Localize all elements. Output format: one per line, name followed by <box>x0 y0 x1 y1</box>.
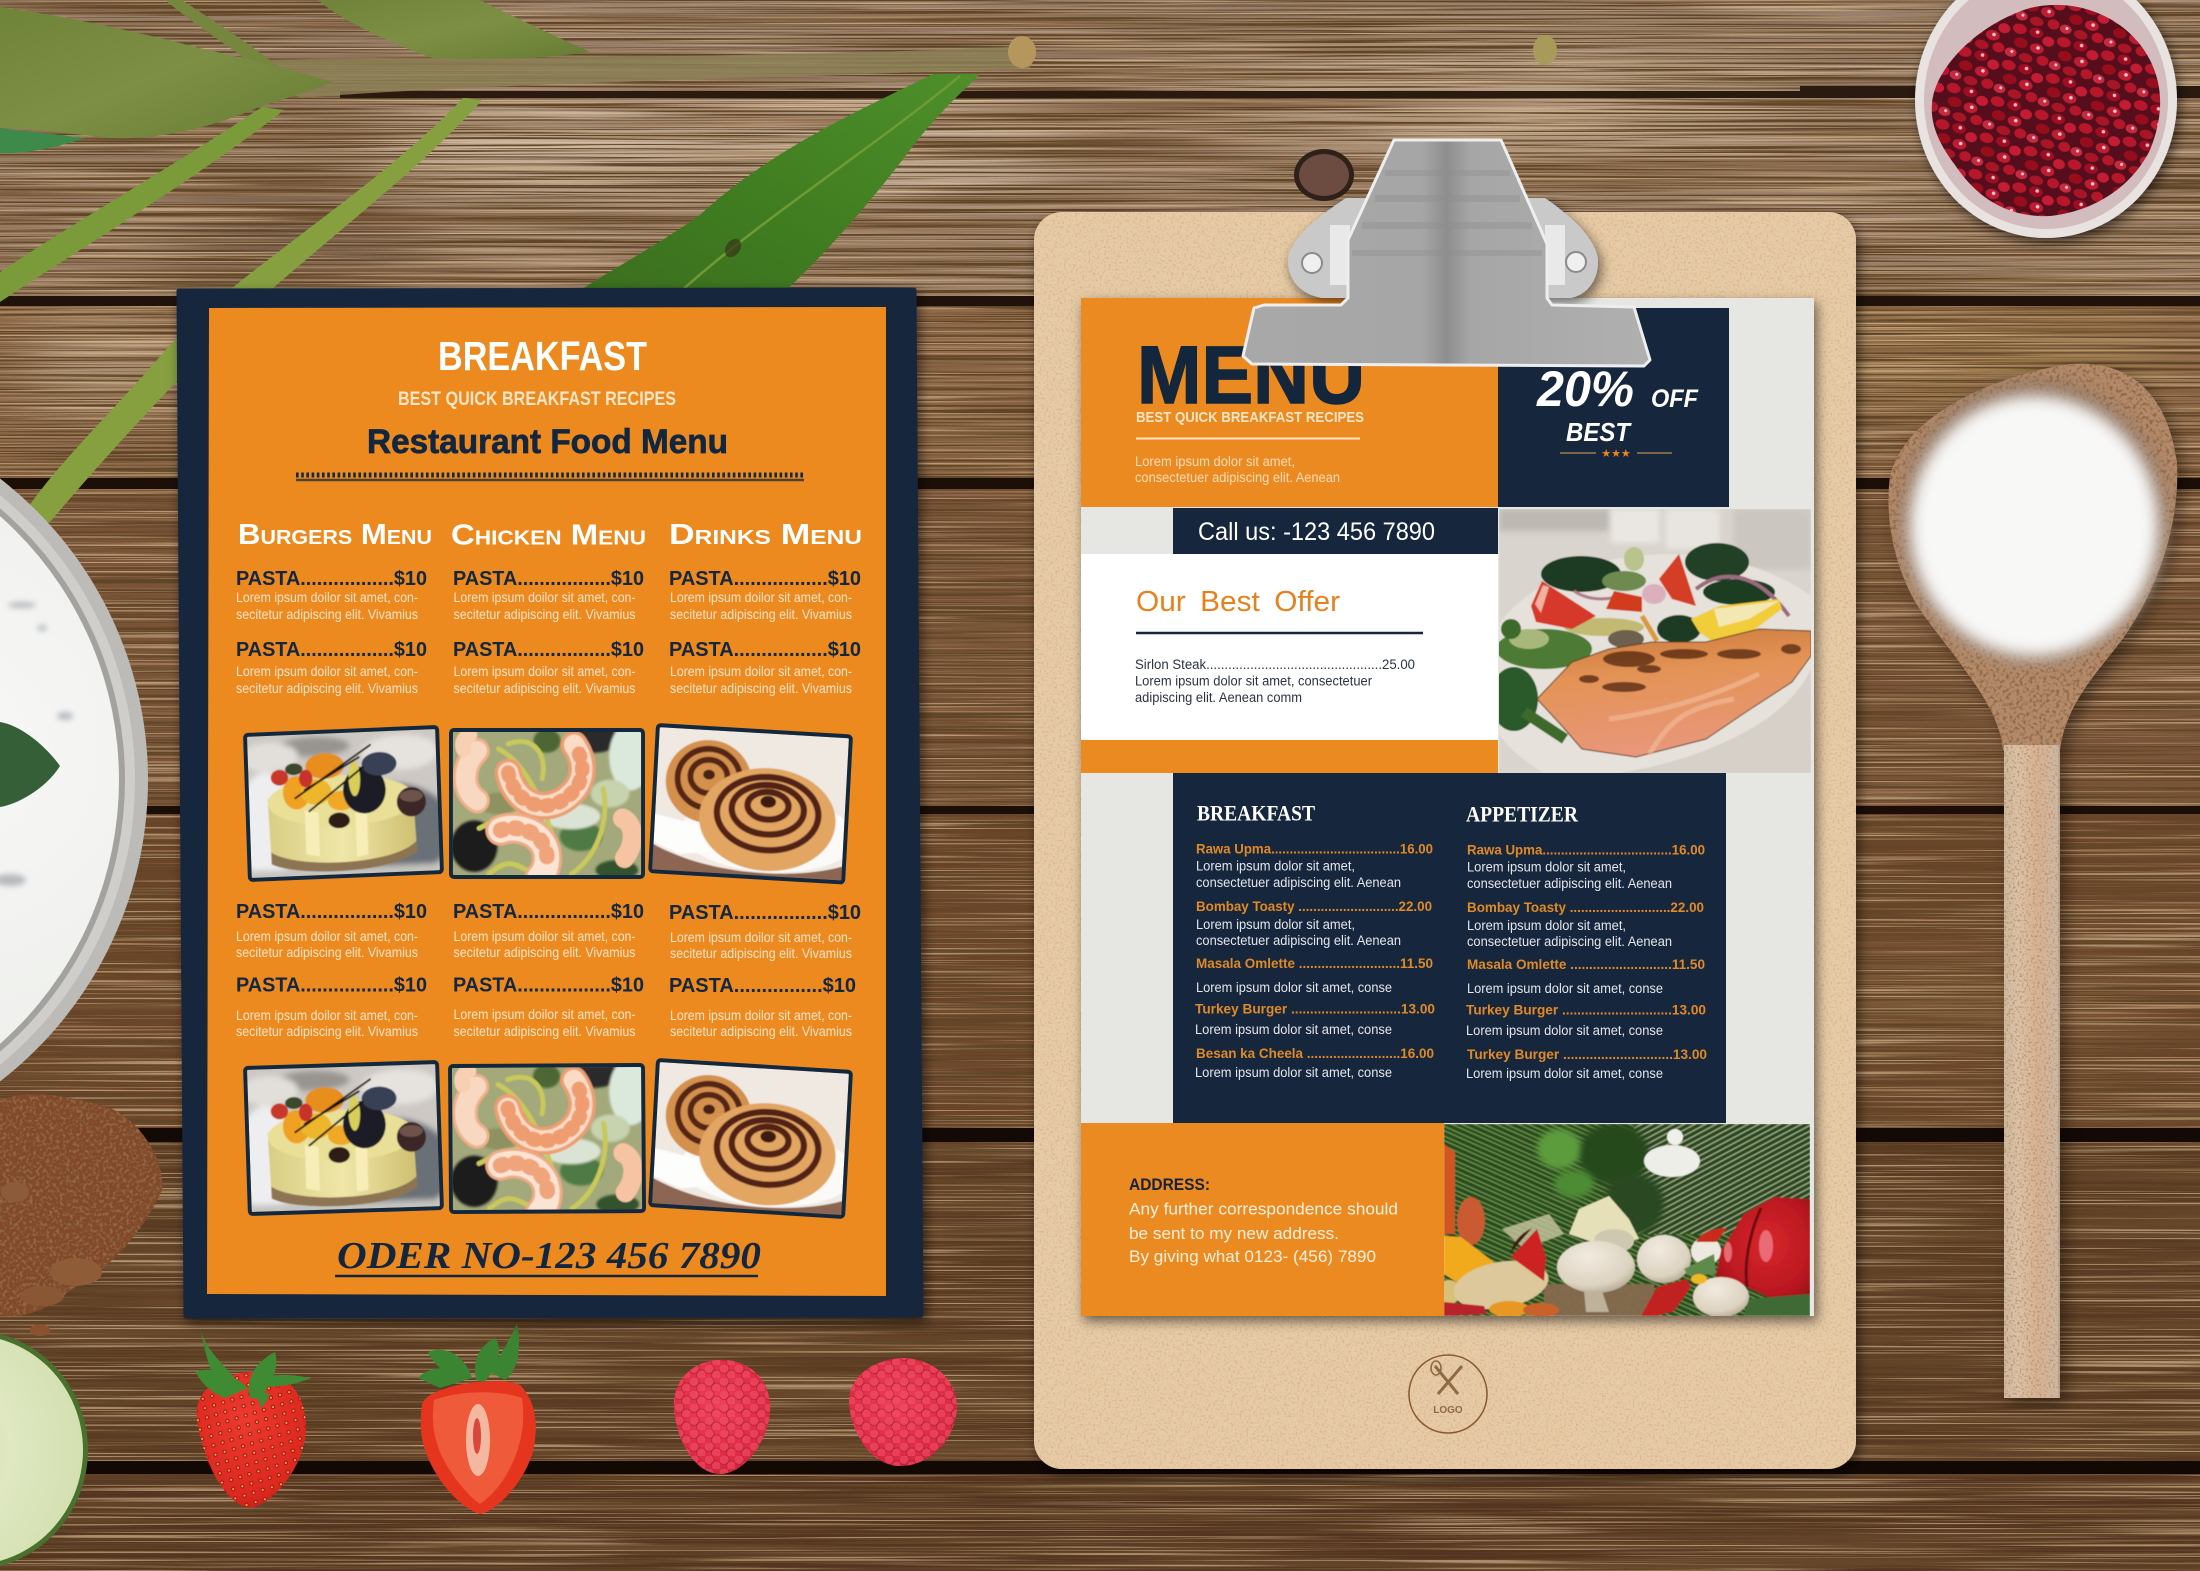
menu rows top: Lorem ipsum doilor sit amet, con- <box>670 589 852 605</box>
column headings <box>238 519 862 552</box>
appetizer list: Lorem ipsum dolor sit amet, conse <box>1467 981 1663 996</box>
breakfast list: Masala Omlette ...........................11.50 <box>1196 955 1433 971</box>
best offer block: Sirlon Steak................................................25.00 <box>1135 657 1415 672</box>
leaf: thin blade lower <box>20 98 482 522</box>
best offer block: Lorem ipsum dolor sit amet, consectetuer <box>1135 674 1372 688</box>
photo: pastry <box>649 1059 862 1219</box>
menu rows bottom: Lorem ipsum doilor sit amet, con- <box>454 928 636 944</box>
dishes panel <box>1173 773 1726 1123</box>
appetizer list: Rawa Upma...................................16.00 <box>1467 842 1705 858</box>
menu rows bottom: secitetur adipiscing elit. Vivamius <box>236 944 418 960</box>
breakfast list: Rawa Upma...................................16.00 <box>1196 840 1433 856</box>
menu rows top <box>236 568 861 696</box>
address text: ADDRESS: <box>1129 1176 1210 1194</box>
spoon handle <box>2004 745 2060 1398</box>
column headings: Drinks Menu <box>669 519 862 551</box>
pomegranate bowl <box>1900 0 2190 238</box>
menu rows bottom: PASTA.................$10 <box>669 902 861 924</box>
breakfast list: Lorem ipsum dolor sit amet, conse <box>1195 1022 1392 1037</box>
menu rows top: PASTA.................$10 <box>669 568 861 590</box>
address text: By giving what 0123- (456) 7890 <box>1129 1247 1376 1266</box>
wood knot <box>1294 149 1354 201</box>
MENU headline: MENU <box>1137 330 1365 421</box>
appetizer list: Lorem ipsum dolor sit amet, conse <box>1466 1066 1663 1081</box>
clip hinge <box>1288 198 1598 298</box>
leaf: dark green corner <box>0 128 85 153</box>
header subtitle: BEST QUICK BREAKFAST RECIPES <box>1136 409 1364 426</box>
subtitle: BEST QUICK BREAKFAST RECIPES <box>398 389 676 410</box>
vegetables photo <box>1437 1124 1810 1317</box>
best offer block <box>1135 586 1423 705</box>
raspberry <box>849 1358 957 1466</box>
photo: pastry <box>649 724 862 884</box>
best offer block: adipiscing elit. Aenean comm <box>1135 690 1302 705</box>
appetizer list: consectetuer adipiscing elit. Aenean <box>1467 876 1672 891</box>
menu rows bottom: secitetur adipiscing elit. Vivamius <box>454 944 636 960</box>
photo: shrimp salad <box>450 723 652 880</box>
title: BREAKFAST <box>438 333 647 379</box>
leaf: thin stem top <box>165 0 280 76</box>
appetizer list <box>1466 802 1707 1081</box>
menu rows bottom: PASTA.................$10 <box>236 974 427 996</box>
menu rows bottom: PASTA.................$10 <box>236 901 427 923</box>
address text: be sent to my new address. <box>1129 1224 1339 1243</box>
menu rows top: Lorem ipsum doilor sit amet, con- <box>454 589 636 605</box>
menu rows top: secitetur adipiscing elit. Vivamius <box>670 606 852 622</box>
best offer block: Our Best Offer <box>1136 586 1340 618</box>
strawberry whole <box>196 1328 311 1508</box>
column headings: Chicken Menu <box>451 520 646 552</box>
clipboard <box>1034 140 1859 1469</box>
leaf: thin blade upper <box>0 107 284 302</box>
order number: ODER NO-123 456 7890 <box>337 1235 761 1277</box>
menu rows bottom: Lorem ipsum doilor sit amet, con- <box>236 1007 418 1023</box>
menu rows top: secitetur adipiscing elit. Vivamius <box>454 606 636 622</box>
address text: Any further correspondence should <box>1129 1200 1398 1218</box>
left menu card <box>179 290 921 1316</box>
menu rows bottom: secitetur adipiscing elit. Vivamius <box>236 1023 418 1039</box>
salmon photo <box>1499 509 1811 773</box>
appetizer list: Bombay Toasty ...........................22.00 <box>1467 899 1704 915</box>
menu rows bottom: PASTA.................$10 <box>453 974 644 996</box>
breakfast list: BREAKFAST <box>1197 800 1315 826</box>
appetizer list: Turkey Burger .............................13.00 <box>1467 1046 1707 1062</box>
menu rows top: Lorem ipsum doilor sit amet, con- <box>670 663 852 679</box>
leaf: large olive <box>0 7 332 138</box>
raspberry <box>674 1360 770 1474</box>
discount badge: ★★★ <box>1601 447 1631 460</box>
menu rows bottom: Lorem ipsum doilor sit amet, con- <box>670 929 852 945</box>
menu rows top: secitetur adipiscing elit. Vivamius <box>236 606 418 622</box>
breakfast list: Bombay Toasty ...........................22.00 <box>1196 898 1432 914</box>
breakfast list: Turkey Burger .............................13.00 <box>1195 1000 1435 1016</box>
address text <box>1129 1176 1398 1266</box>
breakfast list: consectetuer adipiscing elit. Aenean <box>1196 875 1401 890</box>
cucumber slice <box>0 1330 88 1570</box>
appetizer list: consectetuer adipiscing elit. Aenean <box>1467 934 1672 949</box>
breakfast list: Lorem ipsum dolor sit amet, <box>1196 858 1355 874</box>
appetizer list: Lorem ipsum dolor sit amet, <box>1467 918 1626 933</box>
appetizer list: Turkey Burger .............................13.00 <box>1466 1002 1706 1018</box>
appetizer list: Lorem ipsum dolor sit amet, <box>1467 860 1626 874</box>
stem knobs <box>1008 35 1557 68</box>
leaf: green blade <box>578 74 980 292</box>
menu rows top: PASTA.................$10 <box>236 639 427 661</box>
menu rows bottom: Lorem ipsum doilor sit amet, con- <box>670 1007 852 1023</box>
menu rows bottom: PASTA................$10 <box>669 975 856 997</box>
call bar <box>1173 508 1498 554</box>
header divider and intro <box>1135 438 1360 485</box>
menu rows bottom: Lorem ipsum doilor sit amet, con- <box>454 1006 636 1022</box>
offer panel <box>1081 554 1498 740</box>
column headings: Burgers Menu <box>238 519 432 551</box>
orange panel <box>207 307 886 1296</box>
menu rows top: PASTA.................$10 <box>453 639 644 661</box>
engraved logo <box>1409 1355 1487 1433</box>
breakfast list: Lorem ipsum dolor sit amet, conse <box>1195 1065 1392 1080</box>
menu rows top: Lorem ipsum doilor sit amet, con- <box>236 589 418 605</box>
header divider and intro: Lorem ipsum dolor sit amet, <box>1135 454 1295 469</box>
photo: cake <box>234 726 455 884</box>
breakfast list: consectetuer adipiscing elit. Aenean <box>1196 933 1401 948</box>
menu rows top: secitetur adipiscing elit. Vivamius <box>454 680 636 696</box>
discount badge: BEST <box>1566 417 1632 447</box>
menu rows top: PASTA.................$10 <box>453 568 644 590</box>
discount badge <box>1536 361 1699 460</box>
photo: cake <box>234 1061 455 1218</box>
wooden spoon <box>1888 364 2183 1404</box>
menu rows top: PASTA.................$10 <box>669 639 861 661</box>
menu rows top: secitetur adipiscing elit. Vivamius <box>236 680 418 696</box>
discount badge: OFF <box>1651 385 1699 413</box>
appetizer list: Masala Omlette ...........................11.50 <box>1467 956 1705 972</box>
photo: shrimp salad <box>449 1058 653 1215</box>
clip plate <box>1243 140 1650 366</box>
navy card <box>179 290 921 1316</box>
breakfast list: Besan ka Cheela .........................16.00 <box>1196 1045 1434 1061</box>
mint leaf <box>0 722 60 807</box>
cocoa powder <box>0 1094 162 1336</box>
salt <box>1909 395 2159 657</box>
right menu sheet <box>1081 298 1859 1317</box>
board <box>1034 212 1856 1469</box>
appetizer list: APPETIZER <box>1466 802 1579 826</box>
orange strip <box>1081 740 1498 773</box>
menu rows bottom: secitetur adipiscing elit. Vivamius <box>454 1023 636 1039</box>
stem <box>250 46 1030 98</box>
menu rows bottom: Lorem ipsum doilor sit amet, con- <box>236 928 418 944</box>
menu rows bottom: secitetur adipiscing elit. Vivamius <box>670 945 852 961</box>
appetizer list: Lorem ipsum dolor sit amet, conse <box>1466 1023 1663 1038</box>
menu rows top: Lorem ipsum doilor sit amet, con- <box>236 663 418 679</box>
menu rows bottom: secitetur adipiscing elit. Vivamius <box>670 1023 852 1039</box>
menu rows top: PASTA.................$10 <box>236 568 427 590</box>
menu rows bottom <box>236 901 861 1039</box>
menu rows bottom: PASTA.................$10 <box>453 901 644 923</box>
header orange panel <box>1081 298 1498 507</box>
metal clip <box>1243 140 1650 366</box>
yogurt bowl <box>0 399 148 1161</box>
menu rows top: secitetur adipiscing elit. Vivamius <box>670 680 852 696</box>
menu rows top: Lorem ipsum doilor sit amet, con- <box>454 663 636 679</box>
call bar: Call us: -123 456 7890 <box>1198 518 1435 546</box>
header navy panel <box>1498 308 1729 507</box>
breakfast list <box>1195 800 1435 1080</box>
strawberry halved <box>418 1323 536 1514</box>
breakfast list: Lorem ipsum dolor sit amet, <box>1196 917 1355 932</box>
address panel <box>1081 1123 1444 1316</box>
dotted divider <box>296 475 804 480</box>
leaf: top olive <box>318 0 590 59</box>
heading: Restaurant Food Menu <box>367 423 728 461</box>
header divider and intro: consectetuer adipiscing elit. Aenean <box>1135 470 1340 485</box>
engraved logo: LOGO <box>1433 1405 1463 1416</box>
berries row <box>196 1323 957 1514</box>
discount badge: 20% <box>1536 361 1634 417</box>
breakfast list: Lorem ipsum dolor sit amet, conse <box>1196 980 1392 995</box>
